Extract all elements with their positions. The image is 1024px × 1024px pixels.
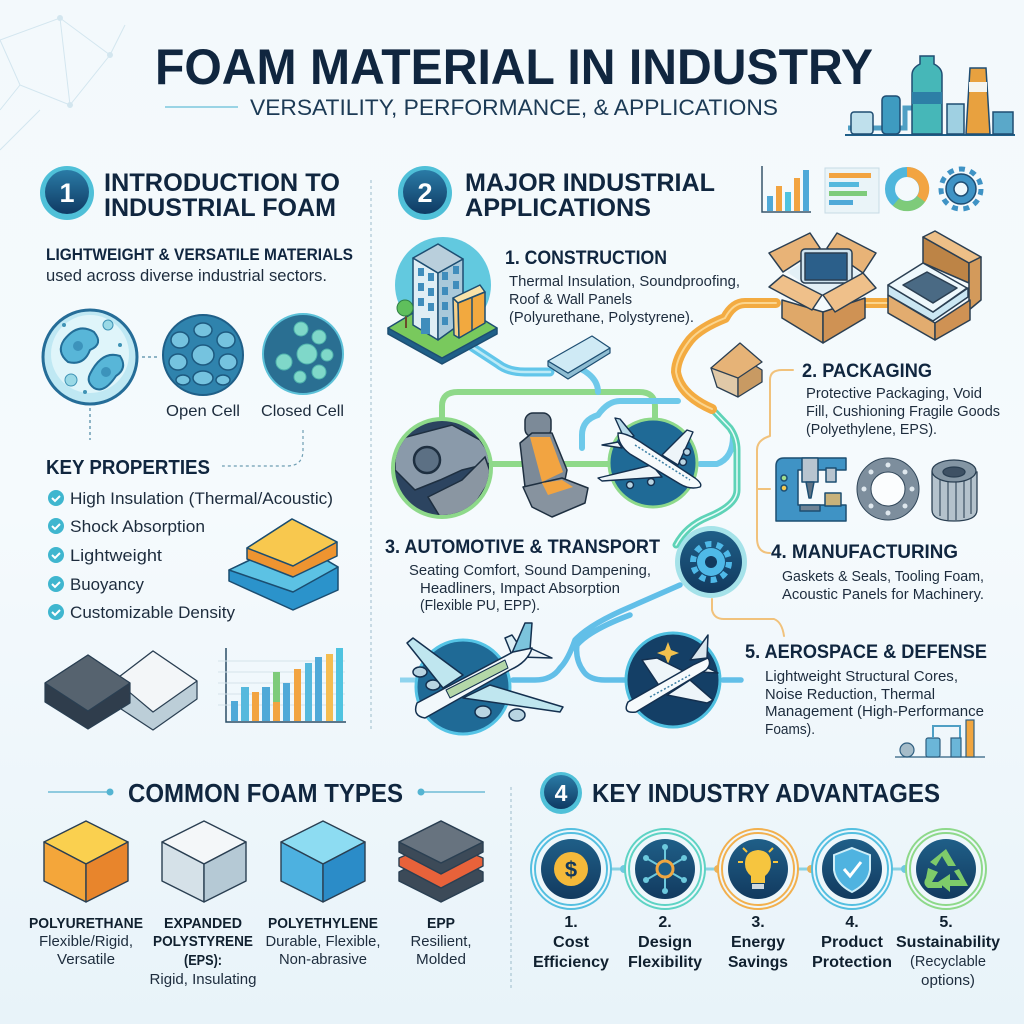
EPS text: POLYSTYRENE (153, 933, 253, 950)
advantage labels: Design (638, 934, 692, 951)
advantage labels: options) (921, 972, 975, 989)
construction text: 1. CONSTRUCTION (505, 248, 667, 269)
automotive text: Headliners, Impact Absorption (420, 580, 620, 597)
polyurethane text: Flexible/Rigid, (39, 933, 133, 950)
icon: open box with monitor (769, 233, 876, 343)
divider: sections 1 and 2 (370, 180, 372, 730)
title: FOAM MATERIAL IN INDUSTRY (155, 39, 873, 95)
closed cell label: Closed Cell (261, 403, 344, 420)
icon: small factory (895, 720, 985, 757)
icon: building (388, 237, 497, 364)
icon: cost efficiency: $ (565, 857, 577, 882)
panel: common foam types (29, 778, 485, 988)
icon: cost efficiency (531, 829, 611, 909)
panel: key industry advantages (531, 772, 1000, 989)
advantage labels: 2. (658, 914, 672, 931)
intro text (46, 245, 353, 285)
subtitle rule left (165, 106, 238, 108)
advantage labels: Flexibility (628, 954, 702, 971)
construction text: (Polyurethane, Polystyrene). (509, 309, 694, 326)
key properties list: High Insulation (Thermal/Acoustic) (70, 489, 333, 508)
heading 1: INDUSTRIAL FOAM (104, 194, 336, 222)
icon: car seat (520, 413, 588, 517)
icon: box with foam insert (888, 231, 981, 340)
packaging text (802, 361, 1000, 438)
polyethylene text: POLYETHYLENE (268, 915, 378, 932)
badge 2 (398, 166, 452, 220)
icon: central gear node (675, 526, 747, 598)
advantage labels: Energy (731, 934, 785, 951)
manufacturing text: Acoustic Panels for Machinery. (782, 586, 984, 603)
icon: mini list bars (825, 168, 879, 213)
advantage labels: 1. (564, 914, 578, 931)
aerospace text: Management (High-Performance (765, 703, 984, 720)
heading 4: KEY INDUSTRY ADVANTAGES (592, 778, 940, 808)
automotive text: Seating Comfort, Sound Dampening, (409, 562, 651, 579)
connectors (610, 865, 940, 873)
badge 2: 2 (417, 178, 433, 208)
intro text: LIGHTWEIGHT & VERSATILE MATERIALS (46, 245, 353, 264)
badge 1 (40, 166, 94, 220)
icon: energy savings (718, 829, 798, 909)
automotive text: 3. AUTOMOTIVE & TRANSPORT (385, 537, 660, 558)
subtitle: VERSATILITY, PERFORMANCE, & APPLICATIONS (250, 95, 778, 120)
packaging text: Fill, Cushioning Fragile Goods (806, 403, 1000, 420)
advantage labels: Efficiency (533, 954, 609, 971)
advantage labels: 5. (939, 914, 953, 931)
icon: sustainability (906, 829, 986, 909)
icon: closed cell (263, 314, 343, 394)
icon: polyurethane cube (44, 821, 128, 902)
connector to key properties (222, 430, 303, 466)
heading with rules (48, 778, 485, 808)
heading with rules: COMMON FOAM TYPES (128, 778, 403, 808)
aerospace text: Lightweight Structural Cores, (765, 668, 958, 685)
packaging text: 2. PACKAGING (802, 361, 932, 382)
advantage labels: (Recyclable (910, 953, 986, 970)
panel: introduction to industrial foam (40, 166, 353, 730)
advantage labels: 4. (845, 914, 859, 931)
icon: gasket ring (857, 458, 919, 520)
intro text: used across diverse industrial sectors. (46, 266, 327, 285)
heading 2: APPLICATIONS (465, 194, 651, 222)
icon: airplane in circle (598, 418, 701, 507)
open cell label: Open Cell (166, 403, 240, 420)
polyethylene text (266, 915, 380, 968)
automotive text: (Flexible PU, EPP). (420, 597, 540, 614)
aerospace text (745, 642, 987, 738)
polyethylene text: Durable, Flexible, (266, 933, 380, 950)
key properties list: Shock Absorption (70, 517, 205, 536)
icon: small box (711, 343, 762, 397)
manufacturing text: Gaskets & Seals, Tooling Foam, (782, 568, 984, 585)
flow paths (442, 303, 890, 680)
icon: EPP layered block (399, 821, 483, 902)
icon: mini bar chart (762, 166, 811, 212)
badge 1: 1 (59, 178, 75, 208)
polyurethane text (29, 915, 143, 968)
icon: foam microstructure (43, 310, 137, 404)
polyurethane text: Versatile (57, 951, 115, 968)
construction text (505, 248, 740, 326)
icon: filter (932, 460, 977, 521)
icon: airliner (400, 623, 563, 734)
EPP text (410, 915, 472, 968)
advantage labels (533, 914, 1000, 989)
key properties list: Customizable Density (70, 603, 235, 622)
heading 2: MAJOR INDUSTRIAL (465, 169, 715, 197)
decorative network, top left (0, 16, 125, 150)
packaging text: Protective Packaging, Void (806, 385, 982, 402)
advantage labels: Protection (812, 954, 892, 971)
icon: EPS cube (162, 821, 246, 902)
advantage labels: Savings (728, 954, 788, 971)
advantage labels: Product (821, 934, 884, 951)
EPP text: Resilient, (410, 933, 472, 950)
connector (90, 357, 158, 440)
construction text: Roof & Wall Panels (509, 291, 632, 308)
polyethylene text: Non-abrasive (279, 951, 367, 968)
advantage labels: Sustainability (896, 934, 1000, 951)
advantage labels: Cost (553, 934, 590, 951)
icon: spaceplane (626, 633, 720, 727)
manufacturing text (771, 542, 984, 603)
heading 1: INTRODUCTION TO (104, 169, 340, 197)
packaging text: (Polyethylene, EPS). (806, 421, 937, 438)
EPS text: Rigid, Insulating (150, 971, 256, 988)
key properties list: Lightweight (70, 546, 162, 565)
key properties list (48, 489, 333, 622)
automotive text (385, 537, 660, 614)
advantage labels: 3. (751, 914, 765, 931)
icon: polyethylene cube (281, 821, 365, 902)
EPS text: EXPANDED (164, 915, 242, 932)
EPS text (150, 915, 256, 988)
EPS text: (EPS): (184, 952, 222, 969)
aerospace text: 5. AEROSPACE & DEFENSE (745, 642, 987, 663)
badge 4 (540, 772, 582, 814)
panel: major industrial applications (385, 166, 1000, 757)
icon: dark and white foam blocks (45, 651, 197, 730)
icon: gear (941, 169, 981, 209)
icon: donut chart (890, 172, 924, 206)
key properties heading: KEY PROPERTIES (46, 457, 210, 479)
icon: car interior (393, 419, 495, 520)
icon: factory, top right (845, 56, 1015, 135)
EPP text: EPP (427, 915, 455, 932)
construction text: Thermal Insulation, Soundproofing, (509, 273, 740, 290)
icon: product protection (812, 829, 892, 909)
polyurethane text: POLYURETHANE (29, 915, 143, 932)
icon: foam block (548, 336, 610, 379)
badge 4: 4 (555, 780, 568, 806)
key properties list: Buoyancy (70, 575, 144, 594)
aerospace text: Noise Reduction, Thermal (765, 686, 935, 703)
icon: CNC machine (776, 458, 846, 521)
divider: bottom sections (510, 787, 512, 988)
manufacturing text: 4. MANUFACTURING (771, 542, 958, 563)
EPP text: Molded (416, 951, 466, 968)
icon: design flexibility (625, 829, 705, 909)
chart: foam bar chart (218, 648, 346, 722)
icon: stacked foam slabs (229, 519, 338, 610)
aerospace text: Foams). (765, 721, 815, 738)
icon: open cell (163, 315, 243, 395)
